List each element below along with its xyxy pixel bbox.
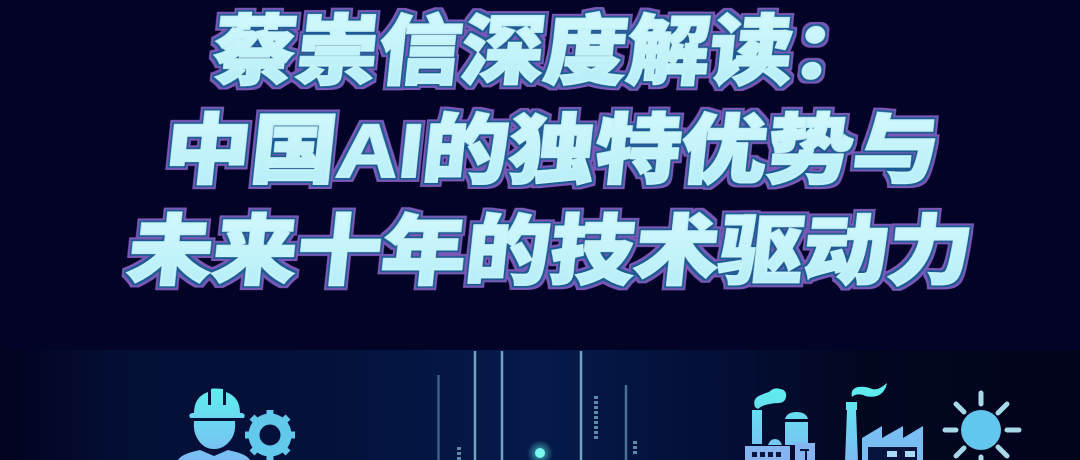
vertical light lines bbox=[438, 351, 635, 460]
icon: worker with hard hat bbox=[178, 388, 250, 460]
icon: sun bbox=[945, 393, 1019, 460]
title line 3: 未来十年的技术驱动力 bbox=[124, 210, 977, 295]
title line 2: 中国AI的独特优势与 bbox=[161, 109, 944, 194]
icon: factory with sawtooth roof bbox=[845, 383, 923, 460]
icon: glowing node bbox=[527, 440, 553, 460]
title bbox=[124, 10, 977, 295]
icon: factory with smoke bbox=[745, 388, 815, 460]
panel: bottom tech band bbox=[0, 350, 1080, 460]
icon: gear bbox=[245, 410, 295, 460]
title line 1: 蔡崇信深度解读： bbox=[209, 10, 880, 95]
